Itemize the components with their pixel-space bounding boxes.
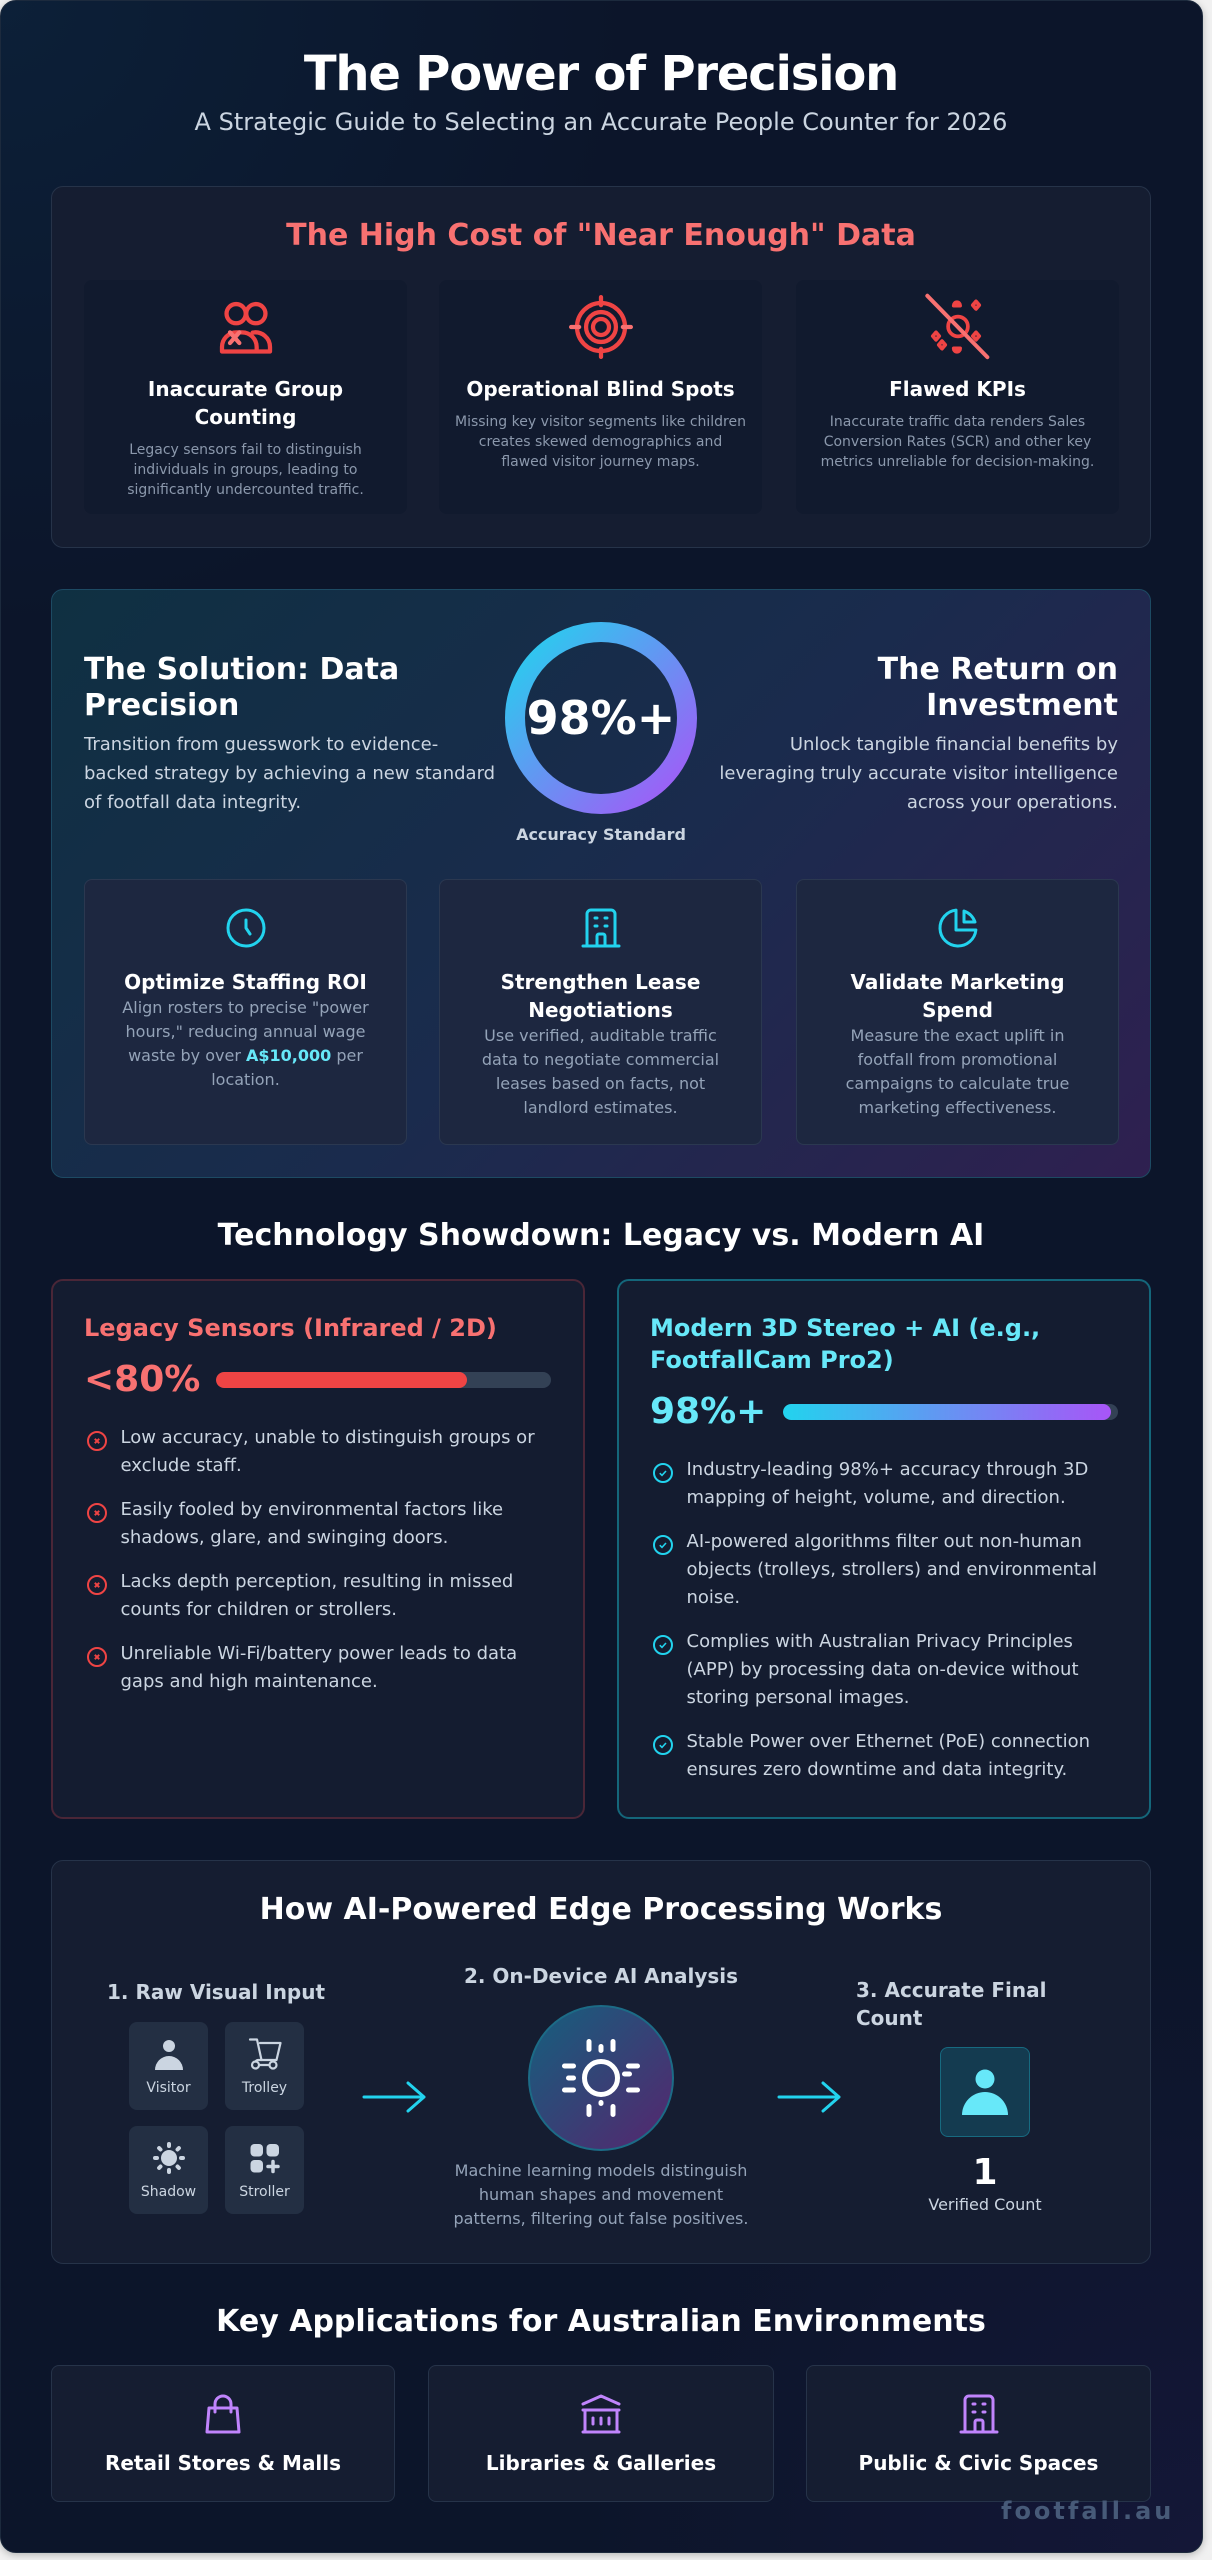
text: step 2 description: patterns, filtering out false positives. (454, 2209, 748, 2228)
label: Public & Civic Spaces (859, 2451, 1098, 2475)
label: verified count: Verified Count (928, 2195, 1042, 2214)
icon: group with cross (220, 302, 272, 354)
card heading: Strengthen Lease (501, 970, 700, 994)
label: Visitor (146, 2080, 191, 2096)
text: return description: Unlock tangible financial benefits by (790, 734, 1118, 755)
card text (821, 414, 1094, 470)
card: operational blind spots (439, 280, 762, 514)
list item: Low accuracy, unable to distinguish groups or (120, 1427, 535, 1448)
icon: stroller (248, 2142, 280, 2174)
card heading: Optimize Staffing ROI (124, 970, 367, 994)
card: public and civic spaces (806, 2365, 1151, 2502)
icon: person (155, 2040, 183, 2070)
list item (87, 1643, 517, 1692)
card text: landlord estimates. (523, 1098, 678, 1117)
icon: clock (226, 908, 266, 948)
list item: shadows, glare, and swinging doors. (120, 1527, 448, 1548)
icon: building (582, 908, 620, 948)
list item: Stable Power over Ethernet (PoE) connection (686, 1731, 1090, 1752)
card heading: Counting (195, 405, 296, 429)
icon: AI processor circle (528, 2005, 674, 2151)
icon: pie chart (938, 908, 978, 948)
list item (87, 1499, 503, 1548)
heading: high cost: The High Cost of "Near Enough" Data (286, 218, 916, 253)
title: The Power of Precision (304, 46, 898, 102)
text: step 2 description: Machine learning models distinguish (455, 2161, 747, 2180)
icon: check (653, 1535, 673, 1555)
card text: footfall from promotional (858, 1050, 1057, 1069)
card heading: Flawed KPIs (889, 377, 1026, 401)
heading: return on investment: The Return on (878, 652, 1118, 687)
icon: shopping bag (199, 2390, 247, 2438)
card text: Legacy sensors fail to distinguish (129, 442, 362, 458)
icon: target (569, 295, 633, 359)
list item (653, 1459, 1088, 1508)
bar: legacy accuracy (216, 1372, 551, 1388)
panel: legacy sensors (51, 1279, 585, 1819)
card: retail stores (51, 2365, 395, 2502)
list item: Unreliable Wi-Fi/battery power leads to data (120, 1643, 517, 1664)
card text: flawed visitor journey maps. (501, 454, 700, 470)
list item: counts for children or strollers. (120, 1599, 397, 1620)
icon: person (962, 2069, 1008, 2115)
heading: the solution: Precision (84, 688, 239, 723)
card: strengthen lease negotiations (439, 879, 762, 1145)
tile: shadow (129, 2126, 208, 2214)
card text: marketing effectiveness. (859, 1098, 1056, 1117)
heading: technology showdown: Technology Showdown: Legacy vs. Modern AI (218, 1218, 984, 1253)
heading: legacy sensors: Legacy Sensors (Infrared / 2D) (84, 1314, 497, 1342)
panel: how edge processing works (51, 1860, 1151, 2264)
list item: objects (trolleys, strollers) and environmental (686, 1559, 1097, 1580)
heading: return on investment: Investment (926, 688, 1118, 723)
icon: verified person box (940, 2047, 1030, 2137)
card text: creates skewed demographics and (479, 434, 722, 450)
tile: trolley (225, 2022, 304, 2110)
list item: gaps and high maintenance. (120, 1671, 378, 1692)
panel: modern 3D stereo AI (617, 1279, 1151, 1819)
card heading (850, 970, 1065, 1022)
step 3 heading: Count (856, 2006, 922, 2030)
tile: stroller (225, 2126, 304, 2214)
text: return description (719, 734, 1118, 813)
card: validate marketing spend (796, 879, 1119, 1145)
icon: building (954, 2390, 1002, 2438)
stat: 98 percent plus: 98%+ (650, 1391, 766, 1432)
card text: Conversion Rates (SCR) and other key (824, 434, 1091, 450)
card text: Use verified, auditable traffic (484, 1026, 717, 1045)
card text: metrics unreliable for decision-making. (821, 454, 1094, 470)
card heading: Spend (922, 998, 993, 1022)
watermark: footfall.au: footfall.au (1001, 2497, 1174, 2525)
card text (846, 1026, 1069, 1117)
label: Stroller (239, 2184, 290, 2200)
icon: cross (87, 1575, 107, 1595)
card text: waste by over A$10,000 per (128, 1046, 363, 1065)
step 3 heading (856, 1976, 1046, 2032)
icon: check (653, 1735, 673, 1755)
card heading: Negotiations (528, 998, 673, 1022)
icon: cross (87, 1431, 107, 1451)
list item: AI-powered algorithms filter out non-human (686, 1531, 1082, 1552)
text: solution description: of footfall data integrity. (84, 792, 301, 813)
stat: count of one: 1 (972, 2152, 998, 2193)
list item: mapping of height, volume, and direction. (686, 1487, 1066, 1508)
chart: accuracy ring (505, 622, 697, 814)
icon: check (653, 1463, 673, 1483)
subtitle: A Strategic Guide to Selecting an Accurate People Counter for 2026 (195, 108, 1007, 136)
card text: data to negotiate commercial (482, 1050, 719, 1069)
icon: sun (153, 2142, 185, 2174)
bar: modern accuracy (783, 1404, 1118, 1420)
step 1 heading: 1. Raw Visual Input (107, 1980, 325, 2004)
list item (87, 1571, 513, 1620)
heading: the solution (84, 652, 399, 723)
card text: Align rosters to precise "power (122, 998, 369, 1017)
card text (122, 998, 369, 1089)
list item: (APP) by processing data on-device without (686, 1659, 1079, 1680)
heading: how it works: How AI-Powered Edge Processing Works (260, 1892, 942, 1927)
icon: check (653, 1635, 673, 1655)
arrow: step 2 to 3 (777, 2081, 843, 2113)
list item: exclude staff. (120, 1455, 242, 1476)
heading: return on investment (878, 652, 1118, 723)
list item: Easily fooled by environmental factors like (120, 1499, 503, 1520)
text: return description: leveraging truly accurate visitor intelligence (719, 763, 1118, 784)
card heading (148, 377, 343, 429)
panel: solution and return on investment (51, 589, 1151, 1178)
card heading: Validate Marketing (850, 970, 1065, 994)
icon: trolley (248, 2038, 282, 2070)
label: Libraries & Galleries (486, 2451, 716, 2475)
card text: Measure the exact uplift in (851, 1026, 1064, 1045)
text: solution description: Transition from guesswork to evidence- (84, 734, 438, 755)
card text: Missing key visitor segments like children (455, 414, 746, 430)
step 3 heading: 3. Accurate Final (856, 1978, 1046, 2002)
card text: individuals in groups, leading to (134, 462, 357, 478)
heading: modern 3D stereo (650, 1314, 1040, 1374)
icon: cross (87, 1647, 107, 1667)
list item: noise. (686, 1587, 740, 1608)
card: libraries and galleries (428, 2365, 774, 2502)
arrow: step 1 to 2 (362, 2081, 428, 2113)
chart: accuracy ring: 98%+ (527, 691, 675, 745)
label: Shadow (141, 2184, 196, 2200)
heading: modern 3D stereo: FootfallCam Pro2) (650, 1346, 894, 1374)
icon: crossed-out gear (925, 294, 990, 360)
label: Retail Stores & Malls (105, 2451, 341, 2475)
list item (653, 1631, 1079, 1708)
list item: ensures zero downtime and data integrity. (686, 1759, 1067, 1780)
text: step 2 description: human shapes and movement (479, 2185, 723, 2204)
text: step 2 description (52, 2159, 1150, 2231)
heading: key applications: Key Applications for Australian Environments (216, 2304, 986, 2339)
card text: Inaccurate traffic data renders Sales (830, 414, 1085, 430)
heading: modern 3D stereo: Modern 3D Stereo + AI (e.g., (650, 1314, 1040, 1342)
card text: hours," reducing annual wage (126, 1022, 365, 1041)
list item: Complies with Australian Privacy Principles (686, 1631, 1073, 1652)
label: Trolley (242, 2080, 287, 2096)
card text: leases based on facts, not (496, 1074, 705, 1093)
card: inaccurate group counting (84, 280, 407, 514)
panel: high cost of near enough data (51, 186, 1151, 548)
text: return description: across your operations. (907, 792, 1118, 813)
card text: campaigns to calculate true (846, 1074, 1069, 1093)
card heading (501, 970, 700, 1022)
text: solution description (84, 734, 495, 813)
icon: cross (87, 1503, 107, 1523)
card heading: Inaccurate Group (148, 377, 343, 401)
card text: location. (211, 1070, 280, 1089)
list item (87, 1427, 535, 1476)
list item: storing personal images. (686, 1687, 910, 1708)
step 2 heading: 2. On-Device AI Analysis (464, 1964, 738, 1988)
card: optimize staffing (84, 879, 407, 1145)
stat: below 80 percent: <80% (84, 1359, 200, 1400)
card text: significantly undercounted traffic. (127, 482, 364, 498)
list item: Lacks depth perception, resulting in missed (120, 1571, 513, 1592)
list item: Industry-leading 98%+ accuracy through 3D (686, 1459, 1088, 1480)
card: flawed KPIs (796, 280, 1119, 514)
list item (653, 1731, 1090, 1780)
card text (127, 442, 364, 498)
card heading: Operational Blind Spots (466, 377, 735, 401)
icon: library (577, 2390, 625, 2438)
tile: visitor (129, 2022, 208, 2110)
card text (482, 1026, 719, 1117)
label: accuracy standard: Accuracy Standard (516, 825, 686, 844)
list item (653, 1531, 1097, 1608)
text: solution description: backed strategy by achieving a new standard (84, 763, 495, 784)
card text (455, 414, 746, 470)
heading: the solution: The Solution: Data (84, 652, 399, 687)
